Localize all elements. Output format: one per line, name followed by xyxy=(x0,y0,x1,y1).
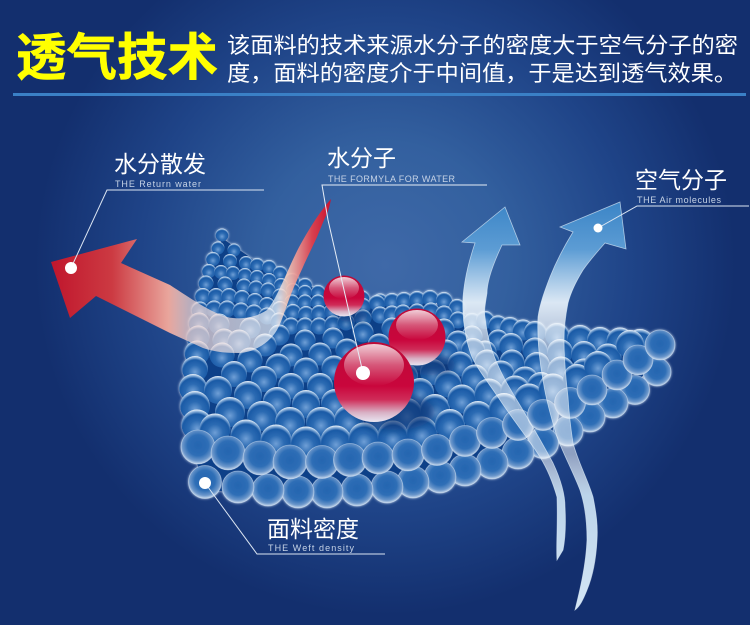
medium red ball xyxy=(388,308,446,366)
description text xyxy=(227,33,738,86)
label english: THE Return water xyxy=(115,179,201,189)
leader dot xyxy=(356,366,370,380)
header rule xyxy=(13,93,746,96)
leader line xyxy=(71,190,264,268)
label english: THE Weft density xyxy=(268,543,354,553)
callout: water molecule xyxy=(322,145,487,380)
label heading: 空气分子 xyxy=(635,167,727,193)
description text: 度，面料的密度介于中间值，于是达到透气效果。 xyxy=(227,61,737,86)
label english: THE FORMYLA FOR WATER xyxy=(328,174,456,184)
fabric base xyxy=(190,238,650,500)
right air arrow xyxy=(538,202,626,610)
leader line xyxy=(205,483,385,554)
front fabric row xyxy=(181,330,675,479)
leader line xyxy=(598,206,749,228)
small red ball xyxy=(324,276,364,316)
fabric xyxy=(179,228,675,508)
callout: fabric density xyxy=(199,477,385,554)
leader line xyxy=(322,185,487,373)
lower fabric layer xyxy=(188,358,671,508)
description text: 该面料的技术来源水分子的密度大于空气分子的密 xyxy=(227,33,738,58)
red ball shadows xyxy=(334,310,456,430)
leader dot xyxy=(594,224,602,232)
header xyxy=(16,29,738,86)
title: 透气技术 xyxy=(16,29,218,86)
callout: water evaporation xyxy=(65,151,264,274)
label english: THE Air molecules xyxy=(637,195,722,205)
water molecules xyxy=(324,276,446,422)
leader dot xyxy=(199,477,211,489)
label heading: 水分散发 xyxy=(114,151,206,177)
leader dot xyxy=(65,262,77,274)
upper fabric layer xyxy=(179,228,654,458)
callout: air molecule xyxy=(594,167,749,232)
label heading: 面料密度 xyxy=(267,516,359,542)
red evaporation arrow xyxy=(51,199,331,353)
large red ball xyxy=(334,342,414,422)
left air arrow xyxy=(462,207,565,560)
label heading: 水分子 xyxy=(327,145,396,171)
